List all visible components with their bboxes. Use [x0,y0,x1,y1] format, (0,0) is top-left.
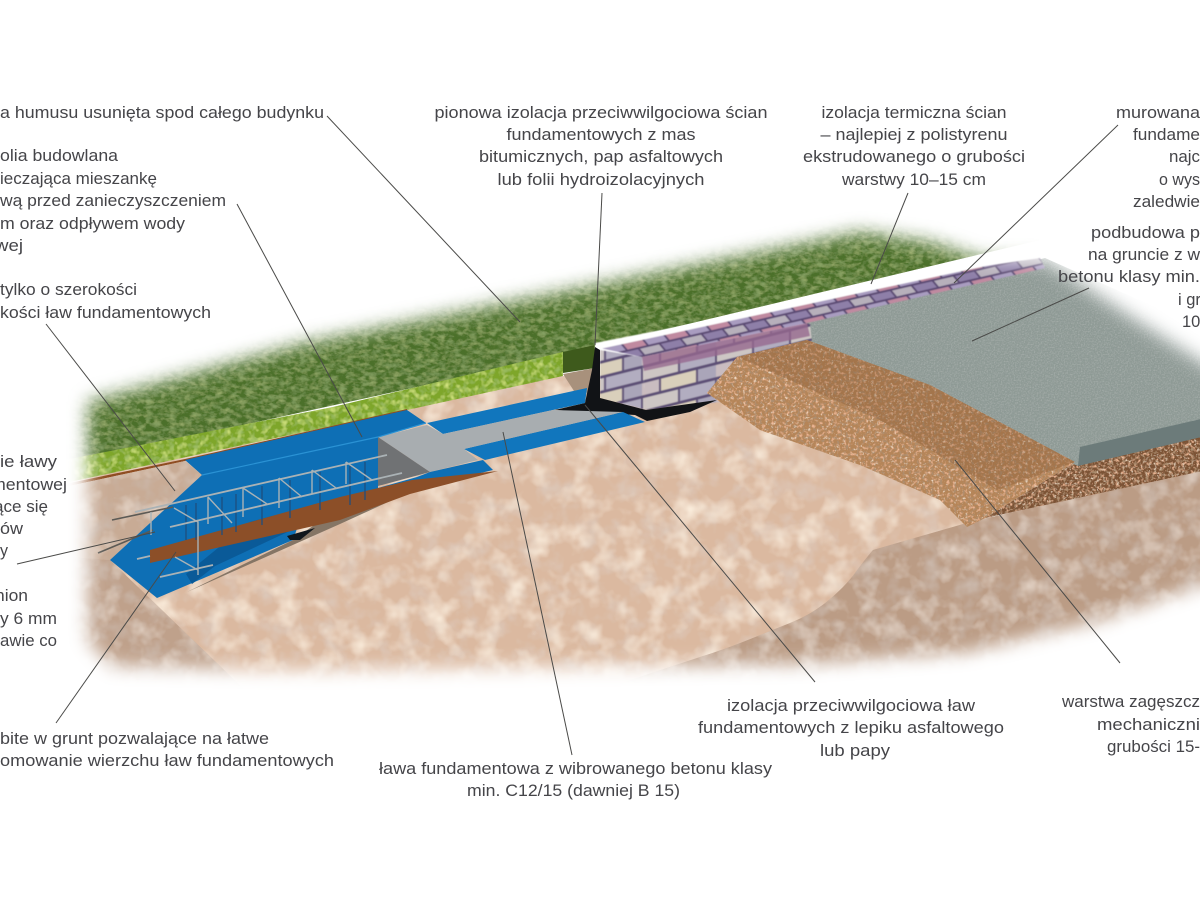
label: compacted layer: grubości 15- [1107,738,1200,756]
concrete slab side [1078,419,1200,466]
label: footing damp proofing: fundamentowych z lepiku asfaltowego [698,719,1004,737]
label: thermal insulation: izolacja termiczna ścian [822,104,1006,122]
right excavation slope [662,472,1200,674]
label: sub-slab: betonu klasy min. [1058,268,1200,286]
label: vertical damp proofing: fundamentowych z mas [506,126,696,144]
label: masonry wall: zaledwie [1133,193,1200,211]
label: sub-slab: na gruncie z w [1088,246,1200,264]
steel stirrups [151,462,372,575]
shadow under formwork [188,502,389,592]
label: level stakes: bite w grunt pozwalające na łatwe [0,730,269,748]
blue foil strips at wall [427,388,645,460]
footing end face [378,437,430,486]
label: footing damp proofing: lub papy [820,742,891,760]
label: footing reinforcement: ie ławy [0,453,58,471]
upper brick row [642,323,810,371]
illustration: foundation cross-section [72,218,1200,682]
foil crease [202,423,426,475]
label: construction foil: wą przed zanieczyszczeniem [0,192,226,210]
label: excavation width [0,281,211,322]
gravel backfill [707,340,1075,527]
thermal insulation strip [594,266,985,350]
asphalt membrane [555,347,717,421]
wall left face [600,350,646,410]
label: thermal insulation: ekstrudowanego o grubości [803,148,1025,166]
label: concrete footing: ława fundamentowa z wibrowanego betonu klasy [379,760,773,778]
leader lines [17,116,1120,755]
upper foil strip [427,388,587,434]
label: excavation width: tylko o szerokości [0,281,137,299]
label: concrete footing: min. C12/15 (dawniej B 15) [467,782,680,800]
concrete footing [378,410,623,486]
label: vertical damp proofing [434,104,768,189]
compacted gravel side under slab [986,437,1200,518]
label: sub-slab [1058,224,1200,331]
label: sub-slab: 10 [1182,313,1200,331]
label: footing damp proofing: izolacja przeciwwilgociowa ław [727,697,975,715]
front foil flap [378,460,493,488]
label: stirrups: y 6 mm [0,610,57,628]
label: stirrups: awie co [0,632,57,650]
label: thermal insulation: warstwy 10–15 cm [841,171,986,189]
rear dark rods [98,507,173,553]
grass lawn [72,218,1015,458]
label: masonry wall: o wys [1159,171,1200,189]
label: construction foil: m oraz odpływem wody [0,215,186,233]
trench lined with blue foil [110,410,426,598]
label: level stakes: omowanie wierzchu ław fundamentowych [0,752,334,770]
label: humus layer: a humusu usunięta spod całego budynku [0,104,324,122]
lower foil strip [464,412,645,460]
label: vertical damp proofing: pionowa izolacja przeciwwilgociowa ścian [434,104,768,122]
label: footing damp proofing [698,697,1004,760]
label: construction foil: ieczająca mieszankę [0,170,157,188]
top rails [135,455,402,577]
label: level stakes [0,730,334,770]
upper left soil [82,461,202,560]
label: thermal insulation: – najlepiej z polistyrenu [820,126,1008,144]
label: masonry wall: fundame [1133,126,1200,144]
stirrups [186,462,365,540]
label: vertical damp proofing: bitumicznych, pap asfaltowych [479,148,723,166]
wooden formwork board [150,471,498,563]
wall front face [642,323,812,410]
brick foundation wall [595,250,1045,410]
label: sub-slab: podbudowa p [1091,224,1200,242]
concrete sub-slab [805,258,1200,466]
label: masonry wall: murowana [1116,104,1200,122]
label: concrete footing [379,760,773,800]
rebar cage [98,455,402,577]
label: excavation width: kości ław fundamentowych [0,304,211,322]
label: footing reinforcement [0,453,67,560]
trench shadows [186,518,287,584]
label: compacted layer [1061,693,1200,756]
label: masonry wall: najc [1169,148,1200,166]
dirt patch behind wall [563,368,592,393]
label: stirrups [0,587,57,650]
label: construction foil: olia budowlana [0,147,119,165]
label: footing reinforcement: y [0,542,9,560]
label: footing reinforcement: ów [0,520,23,538]
label: compacted layer: warstwa zagęszcz [1061,693,1200,711]
label: vertical damp proofing: lub folii hydroizolacyjnych [498,171,704,189]
label: compacted layer: mechaniczni [1097,716,1200,734]
label: thermal insulation [803,104,1025,189]
lime grass strip [60,352,563,486]
left soil slope [79,558,225,676]
sand base layer [74,376,993,682]
wall top course [600,258,1045,357]
dark trimmed grass [563,345,595,373]
label: masonry wall [1116,104,1200,211]
label: construction foil [0,147,226,255]
brown soil line [60,409,407,488]
gravel top face [737,340,1075,490]
